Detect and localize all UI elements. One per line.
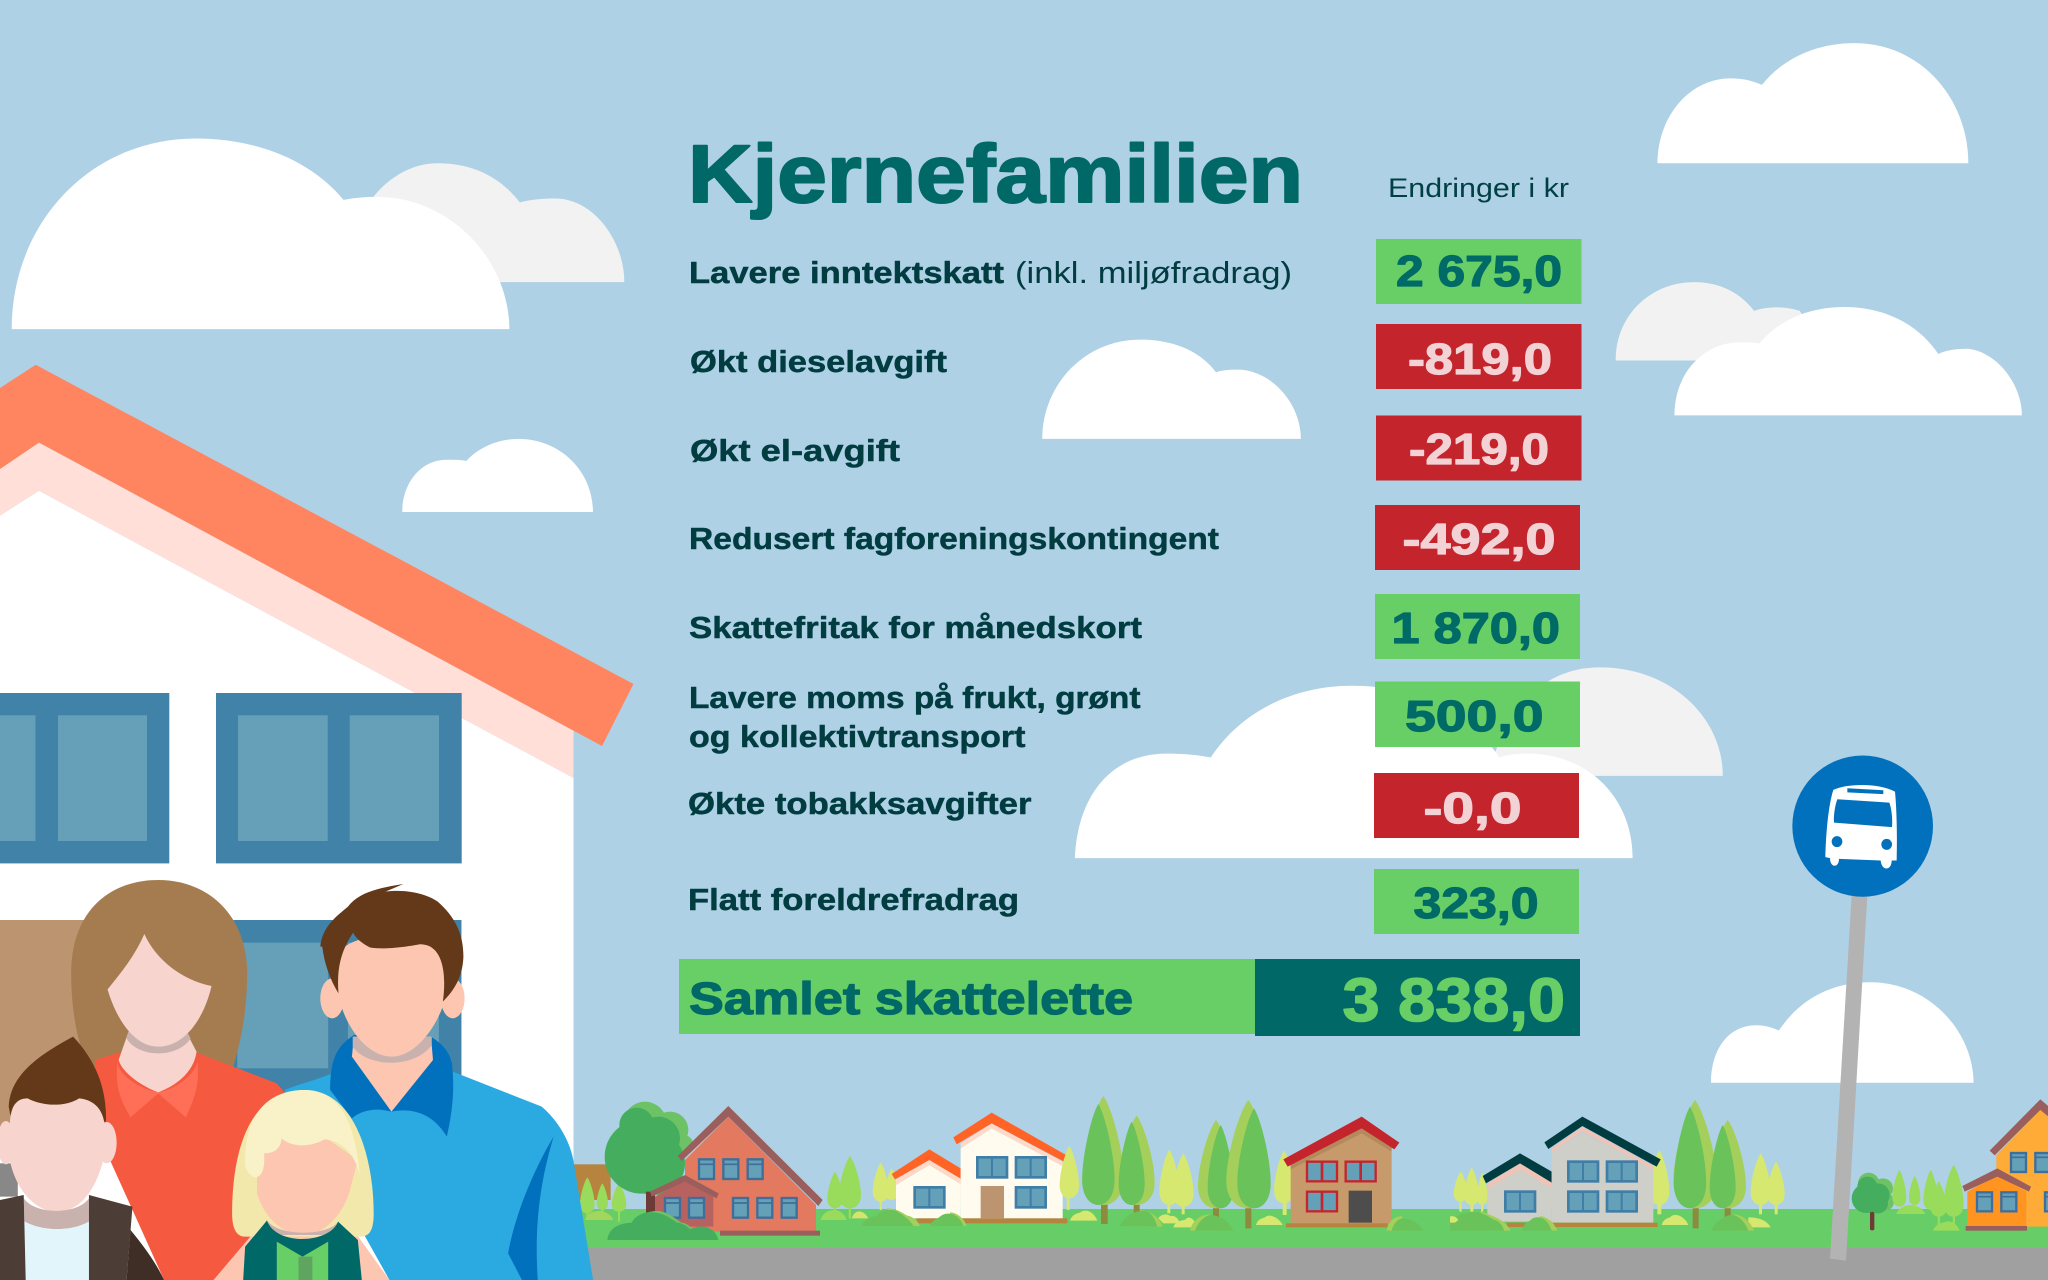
title: Kjernefamilien [688, 129, 1303, 220]
row: okt dieselavgift: Økt dieselavgift [690, 344, 947, 379]
father [285, 884, 593, 1280]
row: skattefritak for manedskort: Skattefritak for månedskort [689, 610, 1142, 645]
row: flatt foreldrefradrag [688, 869, 1579, 934]
row: redusert fagforeningskontingent [689, 505, 1580, 570]
row: lavere moms: og kollektivtransport [689, 719, 1026, 754]
big house: left window [0, 693, 169, 863]
clouds [12, 43, 2022, 1083]
row: okte tobakksavgifter: Økte tobakksavgifter [688, 786, 1032, 821]
daughter [214, 1090, 389, 1280]
total row: samlet skattelette: 3 838,0 [1342, 966, 1565, 1034]
row: flatt foreldrefradrag: Flatt foreldrefradrag [688, 882, 1019, 917]
total row: samlet skattelette [679, 959, 1580, 1036]
door and lower window [0, 920, 461, 1197]
row: lavere moms: Lavere moms på frukt, grønt [689, 680, 1140, 715]
big house: roof [0, 365, 634, 778]
row: redusert fagforeningskontingent: Redusert fagforeningskontingent [689, 521, 1219, 556]
neighbourhood: salmon house and white house [573, 1102, 1069, 1240]
row: okt el-avgift: Økt el-avgift [690, 433, 900, 468]
row: lavere moms: 500,0 [1405, 692, 1544, 741]
sign disc [1792, 755, 1933, 897]
row: okte tobakksavgifter: -0,0 [1424, 784, 1522, 833]
ground and road [560, 1209, 2048, 1280]
bus stop sign [1792, 755, 1933, 1261]
row: okt el-avgift [690, 416, 1582, 480]
big house: right window [216, 693, 462, 863]
big house: wall [0, 491, 574, 1280]
row: lavere moms [689, 680, 1580, 754]
row: okt el-avgift: -219,0 [1409, 425, 1549, 474]
row: okt dieselavgift: -819,0 [1408, 335, 1552, 384]
row: okte tobakksavgifter [688, 773, 1579, 838]
mother [71, 880, 285, 1280]
row: skattefritak for manedskort [689, 594, 1580, 659]
row: lavere inntektskatt [689, 239, 1582, 304]
row: flatt foreldrefradrag: 323,0 [1414, 879, 1538, 928]
row: skattefritak for manedskort: 1 870,0 [1392, 604, 1560, 653]
icon: bus [1825, 785, 1897, 869]
neighbourhood: trees and brown house [1060, 1096, 1423, 1231]
row: lavere inntektskatt: 2 675,0 [1396, 247, 1562, 296]
total row: samlet skattelette: Samlet skattelette [689, 973, 1133, 1024]
neighbourhood: small tree and orange house [1852, 1099, 2048, 1231]
row: redusert fagforeningskontingent: -492,0 [1402, 515, 1556, 564]
row: lavere inntektskatt: (inkl. miljøfradrag) [1015, 255, 1292, 290]
son [0, 1037, 164, 1280]
row: lavere inntektskatt: Lavere inntektskatt [689, 255, 1004, 290]
row: okt dieselavgift [690, 324, 1582, 389]
family illustration [0, 880, 593, 1280]
sign pole [1830, 895, 1867, 1261]
neighbourhood: grey house and trees [1450, 1100, 1785, 1231]
column heading: Endringer i kr [1388, 173, 1569, 203]
